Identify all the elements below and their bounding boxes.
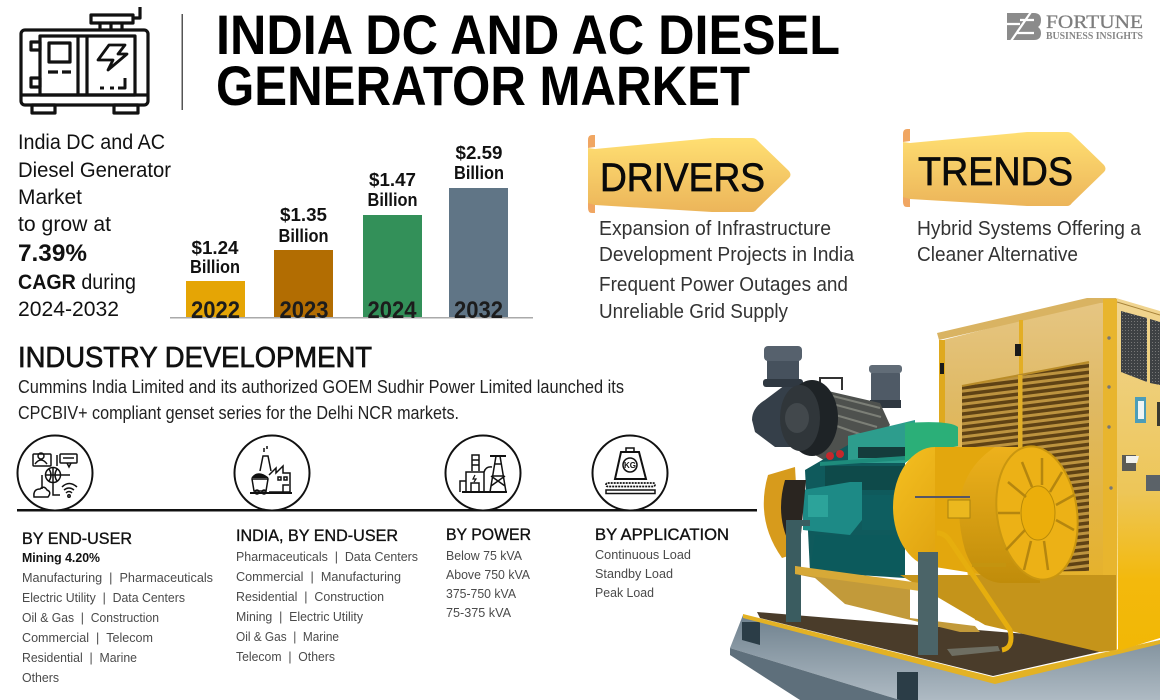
segment: by application: Standby Load [595, 566, 673, 581]
CAGR text block: 7.39% [18, 240, 87, 267]
industry development text [18, 377, 624, 423]
icon: load weight: KG [624, 461, 636, 470]
drivers list: Expansion of Infrastructure [599, 218, 831, 240]
trends list [917, 218, 1142, 266]
CAGR text block: CAGR during [18, 271, 136, 294]
segment: india, by end-user: Oil & Gas | Marine [236, 629, 339, 644]
header divider [182, 14, 183, 110]
banner: drivers [588, 135, 790, 213]
icon: generator [21, 7, 148, 113]
segment: india, by end-user: Commercial | Manufacturing [236, 569, 401, 584]
icon: mining and industry [234, 436, 310, 510]
banner: trends [903, 129, 1106, 207]
drivers list: Development Projects in India [599, 244, 855, 266]
junction box [948, 500, 970, 518]
segment: by power: 375-750 kVA [446, 586, 516, 601]
segment: by application: Continuous Load [595, 547, 691, 562]
cabinet front [943, 299, 1116, 652]
bar chart [170, 143, 533, 324]
industry development text: CPCBIV+ compliant genset series for the Delhi NCR markets. [18, 403, 459, 423]
drivers list: Frequent Power Outages and [599, 274, 848, 296]
segment: by power: Above 750 kVA [446, 567, 530, 582]
drivers list [599, 218, 855, 323]
segment: by application: Peak Load [595, 585, 654, 600]
bar chart: Billion [368, 190, 418, 210]
fan cover [988, 441, 1086, 585]
segment: india, by end-user: Mining | Electric Utility [236, 609, 363, 624]
icon: load weight [592, 436, 668, 510]
engine support post left [786, 520, 810, 622]
title [216, 3, 840, 117]
title: INDIA DC AND AC DIESEL [216, 3, 840, 66]
segment: by end-user: Electric Utility | Data Centers [22, 590, 185, 605]
segment: by end-user: Manufacturing | Pharmaceuticals [22, 570, 213, 585]
bar chart: $1.35 [280, 205, 327, 225]
bar chart: Billion [278, 226, 328, 246]
exhaust stacks [752, 385, 800, 447]
industry development text: Cummins India Limited and its authorized GOEM Sudhir Power Limited launched its [18, 377, 624, 397]
trends list: Cleaner Alternative [917, 244, 1078, 266]
segment: india, by end-user [236, 526, 418, 664]
louvers [962, 362, 1089, 572]
mount frame [900, 575, 1116, 652]
segment: india, by end-user: Residential | Construction [236, 589, 384, 604]
segment: by end-user: Residential | Marine [22, 650, 137, 665]
CAGR text block [18, 131, 171, 321]
title: GENERATOR MARKET [216, 54, 750, 117]
CAGR text block: India DC and AC [18, 131, 165, 154]
flywheel [764, 467, 800, 558]
banner: trends: TRENDS [918, 150, 1073, 194]
bar chart: 2032 [454, 297, 503, 324]
bar chart: 2024 [368, 297, 417, 324]
bar chart: $1.47 [369, 170, 416, 190]
segment: by end-user: Oil & Gas | Construction [22, 610, 159, 625]
CAGR text block: to grow at [18, 213, 111, 236]
support post right [918, 552, 938, 655]
skid base [730, 615, 1160, 700]
panel: drivers [588, 135, 855, 323]
segment: by power [446, 525, 531, 620]
CAGR text block: 2024-2032 [18, 298, 119, 321]
segment: by end-user [22, 529, 213, 685]
segment: by application [595, 525, 729, 600]
segment: by power: Below 75 kVA [446, 548, 522, 563]
panel: trends [903, 129, 1142, 266]
bar chart: 2023 [280, 297, 328, 324]
segment: by power: BY POWER [446, 525, 531, 544]
segment: by end-user: Others [22, 670, 59, 685]
segment: by end-user: BY END-USER [22, 529, 132, 548]
bar chart: 2022 [191, 297, 240, 324]
icon: end-user network [18, 436, 92, 510]
timeline line [17, 509, 757, 512]
yellow pipe [937, 533, 1011, 650]
banner: drivers: DRIVERS [600, 156, 765, 200]
segment: india, by end-user: Telecom | Others [236, 649, 335, 664]
CAGR text block: Market [18, 186, 82, 209]
side vents [1121, 311, 1147, 382]
bar chart: $1.24 [192, 238, 238, 258]
side controls [1135, 397, 1146, 423]
icon: power plant [446, 436, 520, 510]
segment: by end-user: Commercial | Telecom [22, 630, 153, 645]
bar chart: Billion [454, 163, 504, 183]
segment: by end-user: Mining 4.20% [22, 550, 100, 565]
turbo housing [815, 388, 890, 475]
bar chart: $2.59 [456, 143, 502, 163]
trends list: Hybrid Systems Offering a [917, 218, 1142, 240]
bar chart: Billion [190, 257, 240, 277]
logo: Fortune Business Insights: BUSINESS INSIGHTS [1046, 31, 1143, 42]
segment: india, by end-user: INDIA, BY END-USER [236, 526, 398, 545]
segment: india, by end-user: Pharmaceuticals | Data Centers [236, 549, 418, 564]
segment: by application: BY APPLICATION [595, 525, 729, 544]
alternator drum [893, 447, 977, 567]
segment: by power: 75-375 kVA [446, 605, 511, 620]
logo: Fortune Business Insights: FORTUNE [1046, 12, 1143, 33]
drivers list: Unreliable Grid Supply [599, 301, 788, 323]
illustration: diesel generator set [730, 298, 1160, 700]
engine block [805, 440, 905, 578]
cabinet side [1116, 298, 1160, 651]
heading: industry development: INDUSTRY DEVELOPMENT [18, 342, 372, 374]
logo: Fortune Business Insights [1007, 12, 1143, 42]
CAGR text block: Diesel Generator [18, 159, 171, 182]
